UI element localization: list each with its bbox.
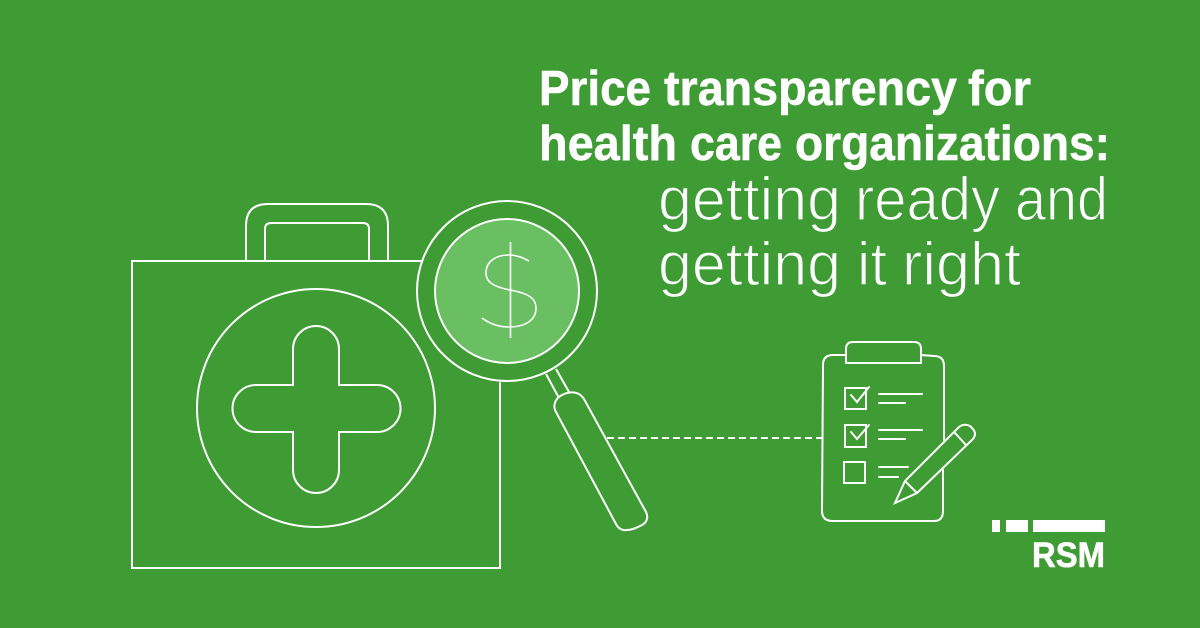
heading: light subtitle <box>658 165 1108 298</box>
pencil <box>895 425 975 503</box>
lens outer ring <box>417 201 597 381</box>
medical cross <box>232 326 400 493</box>
heading: light subtitle: ready <box>855 165 1000 233</box>
medical circle <box>197 289 435 527</box>
heading: bold title: health <box>539 117 677 171</box>
heading: bold title: transparency <box>664 62 957 116</box>
dollar sign <box>482 242 536 338</box>
logo: RSM <box>992 520 1105 575</box>
clipboard clip <box>846 342 921 363</box>
icon: medical case <box>132 204 500 568</box>
heading: light subtitle: it <box>857 230 887 298</box>
unchecked item <box>844 462 908 483</box>
case body <box>132 261 500 568</box>
dashed connector <box>607 437 822 439</box>
heading: light subtitle: getting <box>658 165 841 233</box>
icon: clipboard checklist <box>822 342 975 521</box>
magnifier neck <box>546 369 569 398</box>
magnifier grip <box>554 392 647 530</box>
checked item one <box>845 387 922 409</box>
case handle <box>246 204 388 261</box>
checked item two <box>845 425 922 447</box>
clipboard board <box>822 355 944 521</box>
heading: bold title <box>539 62 1110 171</box>
heading: bold title: organizations: <box>795 117 1110 171</box>
logo bars <box>992 520 1105 532</box>
heading: light subtitle: and <box>1015 165 1108 233</box>
heading: light subtitle: getting <box>658 230 841 298</box>
heading: bold title: Price <box>539 62 651 116</box>
heading: bold title: care <box>690 117 782 171</box>
heading: bold title: for <box>968 62 1031 116</box>
heading: light subtitle: right <box>902 230 1021 298</box>
lens inner disc <box>435 219 579 363</box>
logo wordmark: RSM <box>1032 536 1105 575</box>
icon: magnifying glass <box>417 201 647 530</box>
